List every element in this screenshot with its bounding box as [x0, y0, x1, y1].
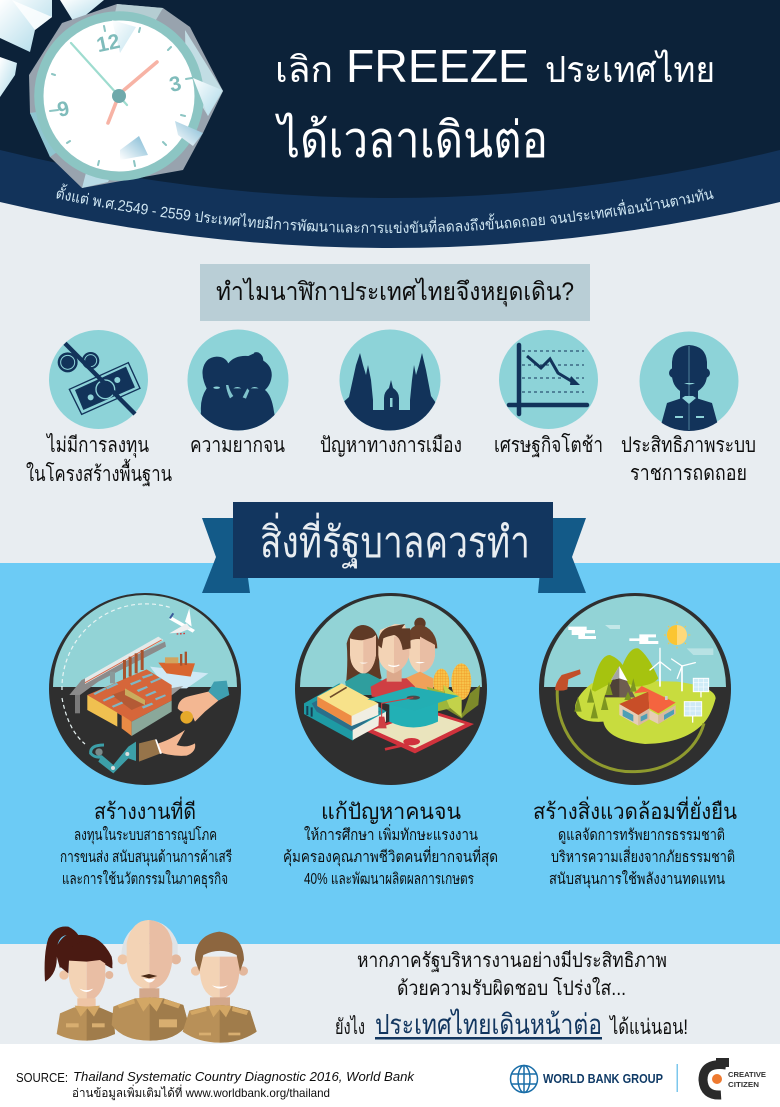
column text: good jobs: การขนส่ง สนับสนุนด้านการค้าเสรี — [60, 849, 232, 867]
title: ได้เวลาเดินต่อ — [274, 112, 548, 168]
ice shards — [0, 0, 104, 97]
island — [575, 648, 716, 744]
title: FREEZE — [346, 40, 529, 92]
column text: solve poverty: คุ้มครองคุณภาพชีวิตคนที่ยากจนที่สุด — [283, 846, 498, 867]
illustration: sustainable environment — [539, 593, 731, 785]
logo: World Bank Group — [510, 1065, 663, 1093]
older man — [112, 920, 188, 1041]
column text: solve poverty: ให้การศึกษา เพิ่มทักษะแรงงาน — [304, 824, 478, 844]
conclusion text: ด้วยความรับผิดชอบ โปร่งใส... — [397, 977, 626, 1000]
subtitle on curved band: ตั้งแต่ พ.ศ.2549 - 2559 ประเทศไทยมีการพัฒนาและการแข่งขันที่ลดลงถึงขั้นถดถอย จนประเทศเพื่อนบ้านตามทัน — [56, 184, 714, 234]
column text: good jobs — [60, 796, 232, 889]
fuel pump hose — [555, 669, 704, 772]
younger man — [183, 932, 257, 1043]
title: ประเทศไทย — [545, 49, 715, 90]
sun — [664, 622, 690, 648]
icon: politics — [340, 330, 440, 440]
column text: good jobs: ลงทุนในระบบสาธารณูปโภค — [74, 826, 217, 845]
wind turbines — [650, 648, 695, 691]
diploma — [365, 708, 474, 753]
hands and coin — [139, 681, 229, 762]
title: เลิก — [275, 49, 333, 90]
column text: solve poverty: แก้ปัญหาคนจน — [321, 799, 461, 824]
logo: Creative Citizen: CITIZEN — [728, 1080, 759, 1089]
icon: slow economy — [499, 330, 598, 429]
column text: sustainable environment: บริหารความเสี่ยงจากภัยธรรมชาติ — [551, 846, 735, 866]
source: SOURCE: — [16, 1070, 68, 1085]
house — [619, 686, 676, 726]
conclusion text: ได้แน่นอน! — [608, 1015, 688, 1039]
ribbon heading: สิ่งที่รัฐบาลควรทำ — [260, 513, 530, 568]
illustration: civil servants — [45, 920, 257, 1043]
column text: good jobs: และการใช้นวัตกรรมในภาคธุรกิจ — [62, 870, 228, 889]
clock numerals: 12 — [94, 30, 122, 57]
title — [274, 40, 715, 168]
panel: why the clock stopped — [26, 264, 756, 486]
clock numerals: 3 — [167, 72, 183, 97]
clock numerals: 9 — [55, 97, 71, 122]
label: ความยากจน — [190, 434, 285, 457]
clouds — [568, 625, 716, 655]
label: ในโครงสร้างพื้นฐาน — [26, 459, 172, 486]
three people — [345, 618, 437, 700]
woman — [45, 926, 115, 1041]
label: ราชการถดถอย — [630, 462, 747, 485]
label: ปัญหาทางการเมือง — [320, 434, 462, 457]
highlighted phrase: ประเทศไทยเดินหน้าต่อ — [375, 1009, 602, 1040]
source: อ่านข้อมูลเพิ่มเติมได้ที่ www.worldbank.org/thailand — [72, 1084, 330, 1101]
illustration: solve poverty — [295, 593, 487, 785]
logo: Creative Citizen — [703, 1058, 766, 1095]
source: Thailand Systematic Country Diagnostic 2016, World Bank — [73, 1069, 416, 1084]
conclusion text — [335, 950, 688, 1040]
icon: bureaucracy — [640, 332, 738, 440]
column text: solve poverty — [283, 799, 498, 888]
elevated rail — [69, 637, 208, 713]
trees — [574, 678, 637, 718]
header background — [0, 0, 780, 248]
column text: sustainable environment: สนับสนุนการใช้พลังงานทดแทน — [549, 870, 725, 889]
label: ไม่มีการลงทุน — [45, 433, 149, 458]
airplane — [169, 608, 195, 634]
mountain — [604, 666, 635, 697]
heading: ทำไมนาฬิกาประเทศไทยจึงหยุดเดิน? — [216, 277, 574, 307]
illustration: good jobs — [49, 593, 241, 785]
panel: what the government should do — [0, 563, 780, 944]
solar panels — [684, 678, 709, 723]
heading — [200, 264, 590, 321]
icon: no investment — [49, 330, 148, 429]
graduation cap — [367, 687, 459, 728]
column text: solve poverty: 40% และพัฒนาผลิตผลการเกษตร — [304, 871, 474, 888]
clock numerals — [55, 30, 183, 122]
icon: poverty — [188, 330, 288, 433]
column text: good jobs: สร้างงานที่ดี — [94, 796, 196, 824]
logo: Creative Citizen: CREATIVE — [728, 1070, 766, 1079]
factory — [87, 650, 172, 736]
panel: conclusion strip — [0, 944, 780, 1044]
ribbon heading — [202, 502, 586, 593]
source — [16, 1069, 416, 1101]
clock hands — [71, 43, 157, 123]
label: เศรษฐกิจโตช้า — [494, 433, 603, 457]
icon: frozen clock — [0, 0, 223, 188]
logo: World Bank Group: WORLD BANK GROUP — [543, 1072, 663, 1086]
conclusion text: หากภาครัฐบริหารงานอย่างมีประสิทธิภาพ — [357, 950, 667, 972]
conclusion text: ยังไง — [335, 1015, 365, 1039]
column text: sustainable environment — [533, 796, 737, 889]
corn — [427, 663, 480, 718]
column text: sustainable environment: สร้างสิ่งแวดล้อมที่ยั่งยืน — [533, 796, 737, 824]
cargo ship — [158, 652, 195, 677]
robot arm — [91, 742, 136, 773]
books — [304, 683, 387, 741]
column text: sustainable environment: ดูแลจัดการทรัพยากรธรรมชาติ — [558, 827, 725, 845]
